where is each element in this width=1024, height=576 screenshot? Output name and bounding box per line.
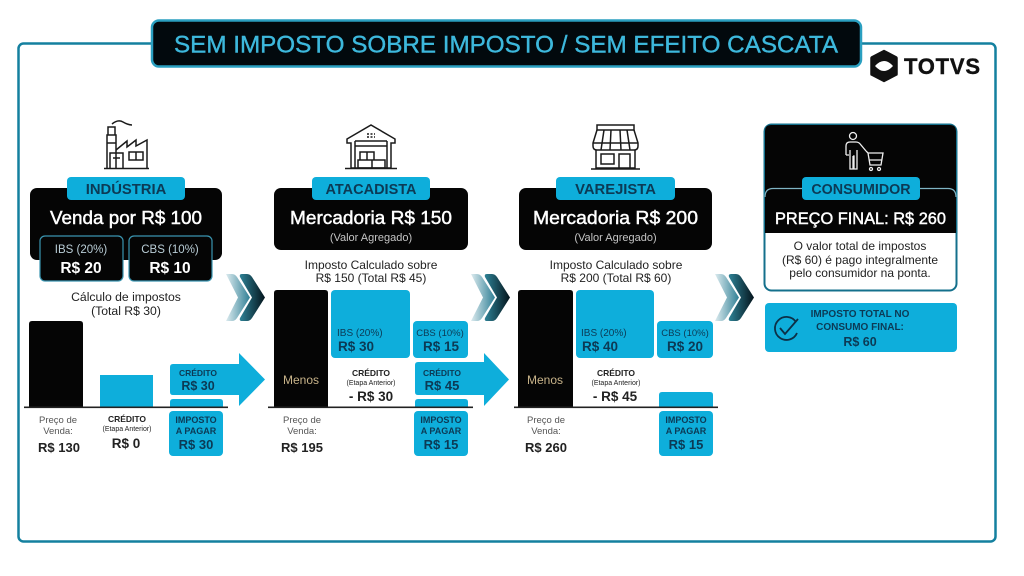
description xyxy=(782,239,938,280)
panel: consumidor xyxy=(764,124,956,290)
label: INDÚSTRIA xyxy=(86,180,167,198)
CBS box: CBS (10%) xyxy=(141,244,199,256)
label: preço: Venda: xyxy=(531,426,561,437)
callout: imposto total: CONSUMO FINAL: xyxy=(816,322,904,333)
box: imposto a pagar: R$ 15 xyxy=(669,437,703,452)
label: preço xyxy=(281,415,323,455)
box: IBS: IBS (20%) xyxy=(337,328,383,339)
box: IBS xyxy=(576,290,654,358)
icon: factory xyxy=(104,121,149,168)
heading: PREÇO FINAL: R$ 260 xyxy=(775,209,946,228)
box: IBS: IBS (20%) xyxy=(581,328,627,339)
CBS box: R$ 10 xyxy=(149,260,191,277)
panel: varejista xyxy=(514,125,718,456)
card xyxy=(764,124,956,290)
box: CBS: R$ 15 xyxy=(423,339,460,354)
arrow: crédito: R$ 45 xyxy=(425,378,459,393)
label: CONSUMIDOR xyxy=(811,182,911,198)
calculation note: Imposto Calculado sobre xyxy=(550,258,683,272)
label: crédito: CRÉDITO xyxy=(108,414,146,424)
box: imposto a pagar xyxy=(659,411,713,456)
title xyxy=(152,20,861,66)
label: crédito xyxy=(346,368,396,404)
box: imposto a pagar: IMPOSTO xyxy=(665,415,707,425)
box: CBS: R$ 20 xyxy=(667,339,703,354)
label: crédito xyxy=(102,414,152,451)
heading: Mercadoria R$ 200 xyxy=(533,207,698,228)
IBS box: R$ 20 xyxy=(60,260,102,277)
logo: TOTVS xyxy=(871,50,980,82)
IBS box: IBS (20%) xyxy=(55,244,107,256)
bar: preço de venda xyxy=(518,290,573,407)
label: preço: Preço de xyxy=(39,415,77,426)
label xyxy=(556,177,675,200)
box: CBS xyxy=(413,321,468,358)
label: preço: R$ 260 xyxy=(525,440,567,455)
box: CBS: CBS (10%) xyxy=(661,328,709,339)
axis xyxy=(24,406,228,408)
label: preço: Venda: xyxy=(287,426,317,437)
title: SEM IMPOSTO SOBRE IMPOSTO / SEM EFEITO CASCATA xyxy=(174,32,838,58)
bar: preço de venda xyxy=(29,321,83,407)
label: crédito: (Etapa Anterior) xyxy=(591,380,641,387)
calculation note: (Total R$ 30) xyxy=(91,304,161,318)
label: preço: Preço de xyxy=(283,415,321,426)
heading: Venda por R$ 100 xyxy=(50,207,202,228)
axis xyxy=(268,406,473,408)
icon: check xyxy=(775,317,798,340)
calculation note: R$ 200 (Total R$ 60) xyxy=(561,271,671,285)
label: ATACADISTA xyxy=(325,182,417,198)
arrow: chevrons 2 xyxy=(471,274,510,321)
label: crédito: (Etapa Anterior) xyxy=(102,426,152,433)
bar: imposto xyxy=(659,392,713,407)
label: crédito: - R$ 45 xyxy=(593,389,638,404)
label: crédito: CRÉDITO xyxy=(352,368,390,378)
calculation note xyxy=(305,258,438,285)
box: imposto a pagar: IMPOSTO xyxy=(420,415,462,425)
axis xyxy=(514,406,718,408)
IBS box xyxy=(40,236,123,281)
icon: store xyxy=(591,125,640,169)
box: IBS: R$ 40 xyxy=(582,339,618,354)
bar: preço de venda: Menos xyxy=(527,373,563,387)
callout: imposto total: R$ 60 xyxy=(843,335,877,349)
bar: imposto xyxy=(415,399,468,407)
icon: warehouse xyxy=(345,125,397,168)
box: imposto a pagar xyxy=(414,411,468,456)
label: preço: R$ 195 xyxy=(281,440,323,455)
box: imposto a pagar: A PAGAR xyxy=(421,426,462,436)
heading: Mercadoria R$ 150 xyxy=(290,207,452,228)
label: VAREJISTA xyxy=(575,182,656,198)
bar: preço de venda: Menos xyxy=(283,373,319,387)
callout: imposto total xyxy=(765,303,957,352)
arrow: chevrons 1 xyxy=(226,274,265,321)
label xyxy=(802,177,920,200)
calculation note: Cálculo de impostos xyxy=(71,290,181,304)
label: crédito: - R$ 30 xyxy=(349,389,393,404)
panel: atacadista xyxy=(268,125,509,456)
main box xyxy=(30,188,222,260)
box: imposto a pagar: R$ 15 xyxy=(424,437,458,452)
label: crédito xyxy=(591,368,641,404)
main box xyxy=(519,188,712,250)
box: imposto a pagar: R$ 30 xyxy=(179,437,213,452)
label xyxy=(312,177,430,200)
arrow: crédito xyxy=(415,353,509,406)
arrow: crédito xyxy=(170,353,265,406)
label: preço: R$ 130 xyxy=(38,440,80,455)
box: imposto a pagar: IMPOSTO xyxy=(175,415,217,425)
card top xyxy=(765,125,956,233)
description: pelo consumidor na ponta. xyxy=(789,266,931,280)
arrow: crédito: CRÉDITO xyxy=(179,368,217,378)
box: IBS xyxy=(331,290,410,358)
label: crédito: R$ 0 xyxy=(112,436,140,451)
label: preço xyxy=(38,415,80,455)
label: crédito: CRÉDITO xyxy=(597,368,635,378)
arrow: chevrons 3 xyxy=(715,274,754,321)
box: imposto a pagar: A PAGAR xyxy=(176,426,217,436)
subheading: (Valor Agregado) xyxy=(330,232,412,244)
calculation note: R$ 150 (Total R$ 45) xyxy=(316,271,426,285)
arrow: crédito: R$ 30 xyxy=(181,379,215,393)
calculation note xyxy=(71,290,181,318)
icon: shopper with cart xyxy=(846,132,883,170)
arrow: crédito: CRÉDITO xyxy=(423,368,461,378)
box: imposto a pagar xyxy=(169,411,223,456)
bar: imposto xyxy=(170,399,223,407)
callout: imposto total: IMPOSTO TOTAL NO xyxy=(811,309,910,320)
label: preço xyxy=(525,415,567,455)
calculation note: Imposto Calculado sobre xyxy=(305,258,438,272)
bar: crédito xyxy=(100,375,153,407)
main box xyxy=(274,188,468,250)
description: (R$ 60) é pago integralmente xyxy=(782,253,938,267)
subheading: (Valor Agregado) xyxy=(574,232,657,244)
label: preço: Preço de xyxy=(527,415,565,426)
bar: preço de venda xyxy=(274,290,328,407)
calculation note xyxy=(550,258,683,285)
logo: TOTVS: TOTVS xyxy=(904,54,980,79)
box: imposto a pagar: A PAGAR xyxy=(666,426,707,436)
box: CBS: CBS (10%) xyxy=(416,328,464,339)
box: IBS: R$ 30 xyxy=(338,339,374,354)
box: CBS xyxy=(657,321,713,358)
label: preço: Venda: xyxy=(43,426,73,437)
CBS box xyxy=(129,236,212,281)
label xyxy=(67,177,185,200)
panel: indústria xyxy=(24,121,265,456)
label: crédito: (Etapa Anterior) xyxy=(346,380,396,387)
description: O valor total de impostos xyxy=(794,239,926,253)
